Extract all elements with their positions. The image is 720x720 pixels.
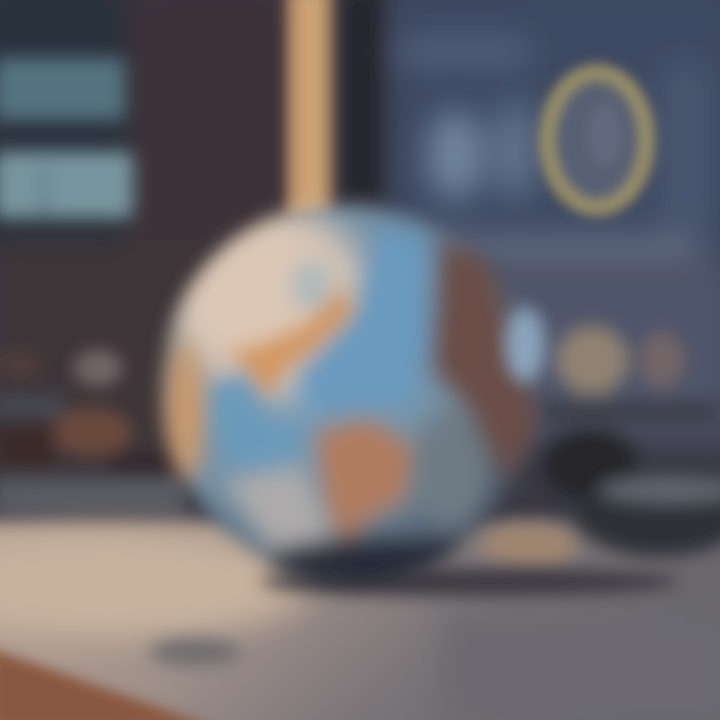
table surface xyxy=(0,522,720,720)
globe: pale patch near top xyxy=(292,261,332,309)
globe: blue ocean lower left xyxy=(212,370,310,470)
globe: blue ocean upper xyxy=(295,225,436,415)
wall texture on right xyxy=(400,40,710,263)
globe: dark base xyxy=(265,539,505,591)
globe: pale lower left xyxy=(225,465,345,570)
globe: cream left hemisphere xyxy=(168,205,368,395)
globe shadow xyxy=(260,568,680,596)
table front edge xyxy=(0,648,220,720)
dark dish at right xyxy=(542,429,720,557)
globe: orange continent xyxy=(225,285,355,400)
warm glow on table xyxy=(482,523,578,567)
globe: light blue right edge xyxy=(505,307,545,383)
gold ring xyxy=(547,72,647,208)
globe: orange left limb xyxy=(165,340,205,480)
lit windows at left xyxy=(0,58,133,218)
globe: south continent orange xyxy=(315,418,420,555)
wall signs at right xyxy=(540,326,720,425)
globe xyxy=(164,205,540,591)
golden vertical beam xyxy=(286,0,334,215)
shelves and objects at left xyxy=(0,350,185,516)
globe: brown right land xyxy=(432,240,540,480)
globe: grey lower right xyxy=(412,410,488,530)
